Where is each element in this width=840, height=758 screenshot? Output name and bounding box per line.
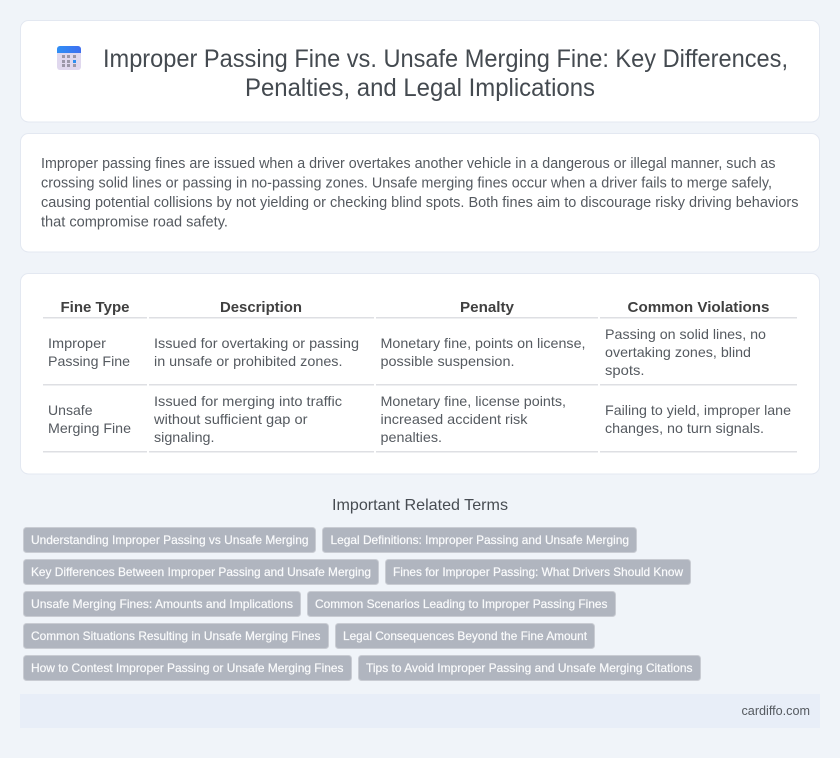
tag: Legal Definitions: Improper Passing and Unsafe Merging (330, 533, 629, 547)
table row: unsafe merging fine: changes, no turn signals. (605, 420, 764, 436)
tag: Understanding Improper Passing vs Unsafe Merging (31, 533, 308, 547)
icon: calendar (57, 46, 81, 70)
table row: improper passing fine: overtaking zones, blind (605, 344, 751, 360)
panel: comparison table (20, 274, 820, 474)
table row: improper passing fine: Passing Fine (48, 353, 130, 369)
tag: Fines for Improper Passing: What Drivers Should Know (393, 565, 683, 579)
tag: Key Differences Between Improper Passing and Unsafe Merging (31, 565, 371, 579)
tag: How to Contest Improper Passing or Unsafe Merging Fines (31, 661, 344, 675)
tag: Unsafe Merging Fines: Amounts and Implications (31, 597, 293, 611)
tag (386, 560, 690, 584)
table row: unsafe merging fine: Failing to yield, improper lane (605, 402, 791, 418)
tag (322, 528, 636, 552)
tag: Tips to Avoid Improper Passing and Unsafe Merging Citations (366, 661, 692, 675)
footer source text: cardiffo.com (742, 704, 810, 718)
table row: unsafe merging fine: Monetary fine, license points, (380, 393, 566, 409)
title: Penalties, and Legal Implications (245, 74, 595, 102)
title: Improper Passing Fine vs. Unsafe Merging Fine: Key Differences, (103, 45, 788, 73)
tag (24, 528, 316, 552)
table row: unsafe merging fine: Unsafe (48, 402, 93, 418)
panel: summary paragraph (20, 134, 820, 252)
text block: summary: Improper passing fines are issued when a driver overtakes another vehicle in a dangerous or illegal manner, such as (41, 156, 776, 172)
table row: unsafe merging fine: without sufficient gap or (153, 411, 308, 427)
table row: improper passing fine: Passing on solid lines, no (605, 326, 766, 342)
table row: unsafe merging fine: Merging Fine (48, 420, 131, 436)
table row: improper passing fine: in unsafe or prohibited zones. (154, 353, 342, 369)
table header: Description (220, 299, 302, 316)
table row: unsafe merging fine (48, 393, 791, 445)
table row: improper passing fine: Improper (48, 335, 106, 351)
tag list: related terms (24, 528, 700, 680)
text block: summary: crossing solid lines or passing in no-passing zones. Unsafe merging fines occur when a driver fails to merge safely, (41, 176, 772, 192)
table row: unsafe merging fine: penalties. (380, 429, 442, 445)
tag (24, 624, 328, 648)
tag (24, 656, 352, 680)
heading: important related terms: Important Related Terms (332, 497, 508, 514)
table row: improper passing fine: Issued for overtaking or passing (154, 335, 359, 351)
footer bar (20, 694, 820, 728)
tag: Common Scenarios Leading to Improper Passing Fines (315, 597, 608, 611)
tag (24, 560, 378, 584)
tag (336, 624, 594, 648)
table header: Common Violations (628, 299, 770, 316)
table row: improper passing fine: possible suspension. (380, 353, 514, 369)
title (103, 45, 788, 102)
table header: Fine Type (60, 299, 130, 316)
table row: improper passing fine: Monetary fine, points on license, (380, 335, 586, 351)
tag: Common Situations Resulting in Unsafe Merging Fines (31, 629, 320, 643)
table header: Penalty (460, 299, 515, 316)
panel: title card (20, 20, 820, 122)
tag: Legal Consequences Beyond the Fine Amount (343, 629, 588, 643)
tag (308, 592, 616, 616)
tag (24, 592, 300, 616)
text block: summary (41, 156, 798, 230)
table row: unsafe merging fine: signaling. (154, 429, 214, 445)
table row: unsafe merging fine: increased accident risk (380, 411, 529, 427)
table row: improper passing fine (48, 326, 766, 378)
table header (60, 299, 770, 316)
table row: improper passing fine: spots. (605, 362, 644, 378)
tag (358, 656, 700, 680)
text block: summary: that compromise road safety. (41, 214, 228, 230)
text block: summary: causing potential collisions by not yielding or checking blind spots. Both fines aim to discourage risky driving behaviors (41, 195, 798, 211)
table row: unsafe merging fine: Issued for merging into traffic (154, 393, 342, 409)
